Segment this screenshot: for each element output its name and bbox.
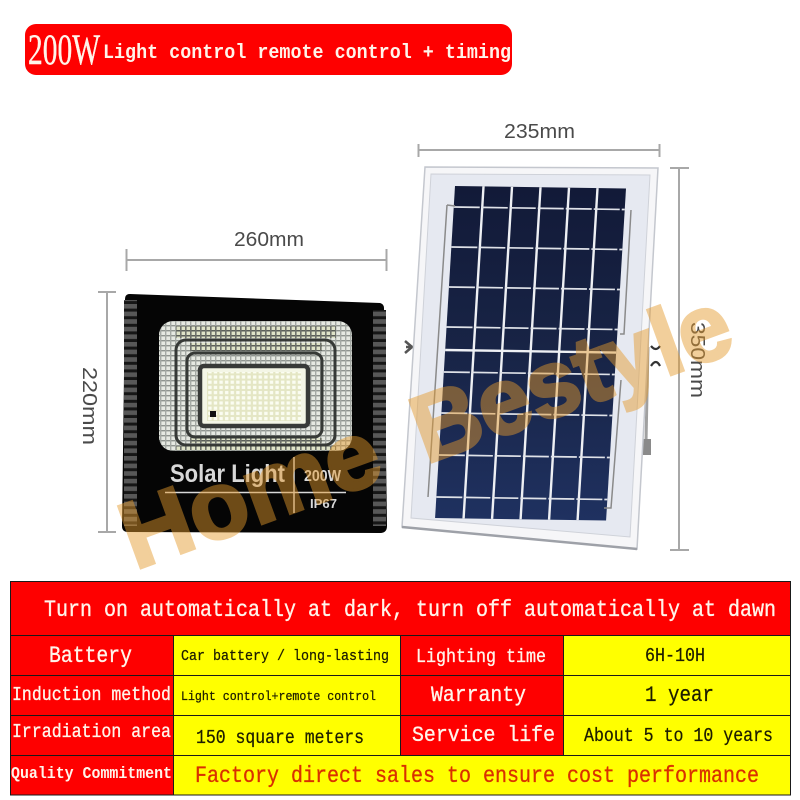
reflector bbox=[159, 321, 352, 451]
dimension: panel height bbox=[670, 168, 708, 550]
dimension: light width bbox=[126, 229, 386, 271]
row: battery: 6H-10H bbox=[645, 645, 705, 667]
panel wiring bbox=[428, 205, 631, 508]
LED array bbox=[200, 366, 308, 426]
dimension: panel width bbox=[418, 121, 660, 157]
row: induction method bbox=[12, 683, 714, 708]
dimension: light height: 220mm bbox=[78, 367, 100, 445]
specification table bbox=[10, 581, 791, 795]
product label: Solar Light bbox=[170, 460, 286, 488]
row: irradiation area: 150 square meters bbox=[196, 727, 364, 749]
row: battery: Lighting time bbox=[416, 646, 546, 668]
row: induction method: Induction method bbox=[12, 684, 171, 706]
row: battery: Car battery / long-lasting bbox=[181, 648, 389, 665]
row: irradiation area: Irradiation area bbox=[12, 721, 171, 743]
row: irradiation area: Service life bbox=[412, 723, 555, 748]
row: irradiation area bbox=[12, 721, 773, 749]
row: battery: Battery bbox=[49, 643, 132, 669]
banner subtitle: Light control remote control + timing bbox=[103, 42, 511, 65]
wattage label: 200W bbox=[28, 27, 100, 74]
cooling fins bbox=[124, 300, 386, 526]
watermark: Bestyle bbox=[397, 271, 745, 484]
watermark bbox=[106, 271, 745, 590]
row: irradiation area: About 5 to 10 years bbox=[584, 725, 773, 747]
dimension: panel height: 350mm bbox=[686, 322, 708, 398]
stand and wing nuts bbox=[405, 341, 660, 455]
floodlight product bbox=[122, 294, 387, 533]
row: battery bbox=[49, 643, 705, 669]
row: induction method: Warranty bbox=[431, 683, 526, 708]
row: induction method: Light control+remote control bbox=[181, 689, 376, 704]
light body bbox=[122, 294, 387, 533]
dimension: light height bbox=[78, 292, 116, 532]
product label bbox=[165, 457, 346, 513]
product label: IP67 bbox=[310, 497, 337, 511]
title banner bbox=[25, 24, 512, 75]
solar panel product bbox=[402, 167, 660, 549]
row: induction method: 1 year bbox=[645, 683, 714, 708]
row: quality commitment: Quality Commitment bbox=[11, 765, 172, 784]
solar cells bbox=[435, 186, 626, 521]
panel frame bbox=[402, 167, 658, 549]
dimension: light width: 260mm bbox=[234, 229, 304, 251]
product label: 200W bbox=[304, 468, 342, 485]
dimension: panel width: 235mm bbox=[504, 121, 575, 143]
watermark: Home bbox=[106, 398, 394, 590]
table background bbox=[10, 581, 791, 795]
